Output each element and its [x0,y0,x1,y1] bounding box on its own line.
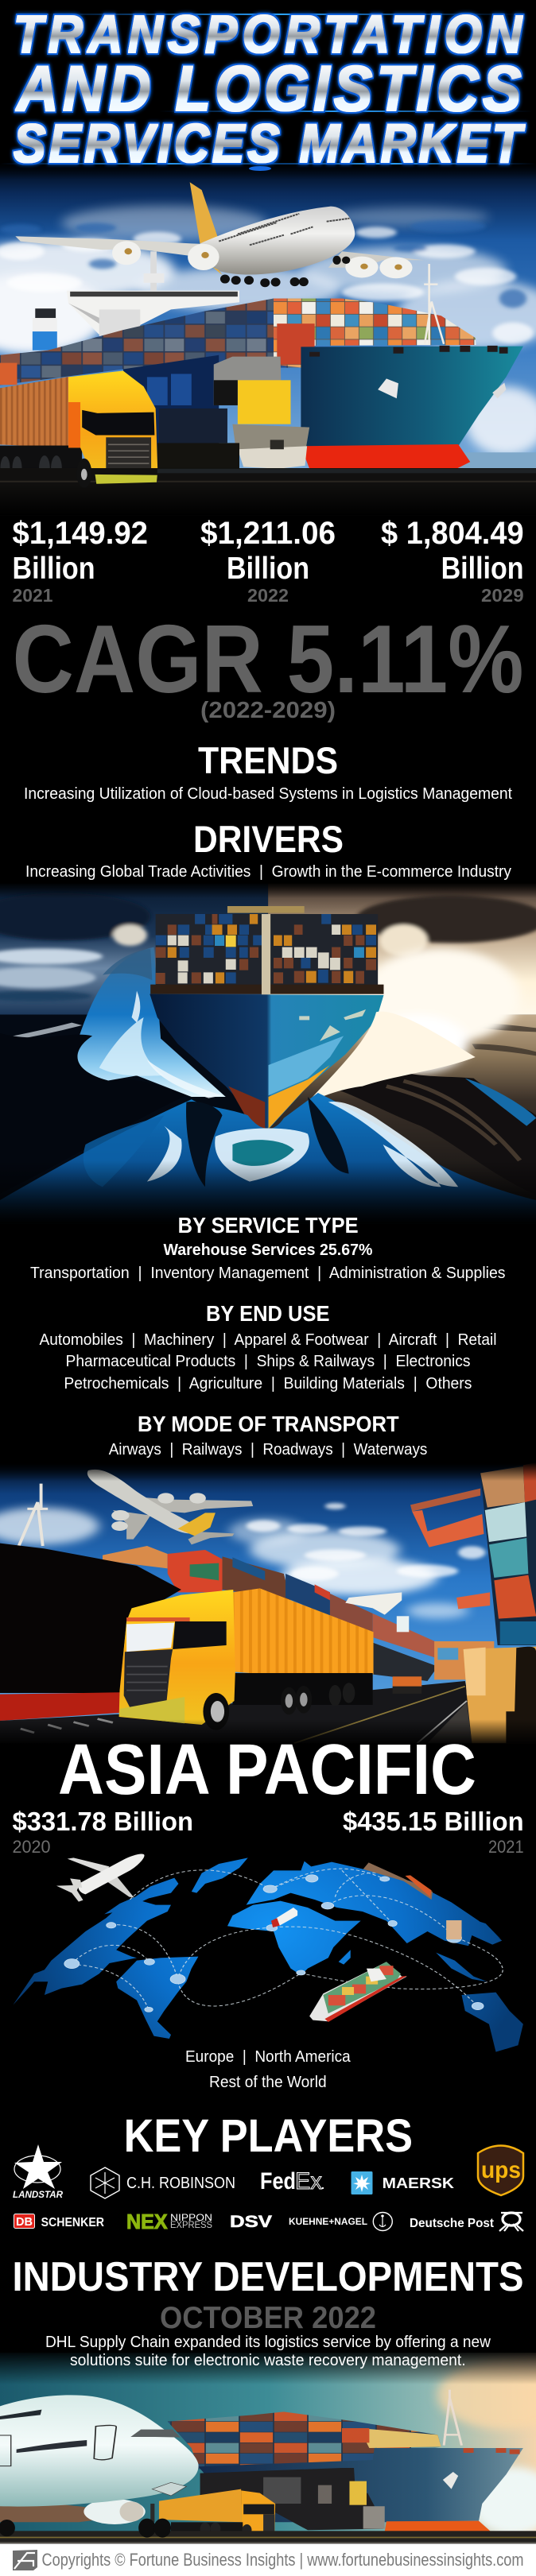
image: truck at port with plane and ship [0,1462,536,1746]
icon: airplane [56,1854,145,1902]
logo: FedEx: Fed [260,2168,296,2194]
value 2022: $1,211.06 [200,516,336,551]
dark wave crests [0,1033,536,1195]
logo: UPS [478,2146,523,2195]
logo: C.H. Robinson: C.H. ROBINSON [126,2175,235,2192]
dashed routes [72,1869,503,2009]
value 2022: Billion [227,552,309,586]
industry developments [13,2254,523,2369]
drivers: DRIVERS [193,818,344,860]
continents [13,1857,523,2052]
icon: parcels [446,1920,461,1939]
logo: Nippon Express: EXPRESS [170,2221,212,2230]
trends [24,739,512,803]
title: AND LOGISTICS [15,52,522,125]
image: airplane, truck, train and ship at port [0,2350,536,2544]
CAGR: (2022-2029) [200,698,336,723]
logo: FedEx: Ex [295,2168,322,2194]
ship hull foreground [0,1544,181,1721]
segment: by mode of transport: BY MODE OF TRANSPORT [138,1412,399,1436]
ship bow [150,994,383,1131]
ship hull [301,346,523,471]
train [200,2468,385,2530]
container stacks [0,296,479,386]
mast [19,1484,48,1546]
right container stack and crane [410,1462,536,1645]
region: Asia Pacific heading: ASIA PACIFIC [58,1730,476,1810]
logo: DSV: DSV [230,2213,272,2231]
logo: UPS: ups [481,2157,521,2183]
foreground waves [0,1093,536,1224]
containers [150,906,383,995]
white foam right [308,1012,476,1102]
trends: Increasing Utilization of Cloud-based Systems in Logistics Management [24,784,512,803]
icon: cargo ship [309,1962,407,2022]
containers [168,2411,441,2469]
drivers: Increasing Global Trade Activities | Growth in the E-commerce Industry [25,862,512,881]
segment: by end use [40,1301,496,1393]
logo: DB Schenker: DB [16,2215,33,2229]
logo: Maersk [352,2171,454,2194]
segment: by service type: BY SERVICE TYPE [178,1213,359,1238]
value 2021: 2021 [488,1837,524,1857]
logo: Fortune Business Insights [13,2550,37,2570]
logo: Nippon Express: NEX [126,2210,168,2233]
train [123,355,309,469]
other regions: Europe | North America [185,2047,351,2066]
value 2029: Billion [441,552,524,586]
key players heading: KEY PLAYERS [124,2110,413,2162]
value 2021: 2021 [13,585,53,606]
logo: C.H. Robinson [91,2167,235,2198]
company logos [13,2144,523,2233]
segment: by end use: Pharmaceutical Products | Ships & Railways | Electronics [65,1352,471,1370]
value 2029 [381,516,524,606]
title glow lines [0,14,536,171]
logo: Nippon Express [126,2210,212,2233]
value 2029: 2029 [481,585,524,606]
segment: by mode of transport [109,1412,427,1458]
value 2021 [343,1807,524,1857]
other regions: Rest of the World [209,2073,327,2091]
value 2021 [13,516,148,606]
market size values [13,516,524,606]
value 2022: 2022 [247,585,289,606]
foremast [424,264,444,344]
value 2020 [13,1807,193,1857]
logo: FedEx: . [321,2179,324,2191]
drivers [25,818,512,881]
value 2021: $435.15 Billion [343,1807,524,1836]
truck [0,370,158,487]
footer [0,2543,536,2576]
segment: by service type: Transportation | Inventory Management | Administration & Supplies [30,1264,506,1282]
segment: by mode of transport: Airways | Railways | Roadways | Waterways [109,1440,427,1458]
logo: Kuehne + Nagel: KUEHNE+NAGEL [289,2216,367,2227]
title: TRANSPORTATION [14,4,523,64]
logo: Landstar: LANDSTAR [13,2189,63,2200]
trends: TRENDS [198,739,338,781]
icon: truck [271,1908,297,1927]
bow spray left [70,947,226,1098]
value 2029: $ 1,804.49 [381,516,524,551]
value 2020: $331.78 Billion [13,1807,193,1836]
truck [119,1588,374,1730]
airplane [0,2395,199,2538]
value 2021: Billion [13,552,95,586]
other regions [185,2047,351,2091]
world map with transport routes [13,1854,523,2052]
logo: Landstar [13,2144,63,2200]
ship hull [198,2448,523,2531]
logo: Kuehne + Nagel [289,2213,392,2230]
icon: train [363,1862,433,1900]
airplane [87,1470,253,1544]
airplane [15,182,424,287]
segment: by service type: Warehouse Services 25.67% [164,1241,372,1259]
segment: by end use: BY END USE [206,1301,329,1326]
logo: Deutsche Post: Deutsche Post [410,2217,494,2230]
image: container ship in stormy sea [0,882,536,1224]
top fade [0,162,536,179]
title: SERVICES MARKET [14,112,526,174]
ship superstructure [33,251,239,351]
truck [159,2489,275,2536]
value 2022 [200,516,336,606]
road [0,1681,479,1743]
logo: Deutsche Post [410,2213,523,2231]
quay [0,468,536,515]
small vehicle [393,1676,421,1694]
title [0,4,536,174]
logo: Nippon Express: NIPPON [170,2214,212,2223]
segment: by service type [30,1213,506,1282]
truck wheel over quay [76,461,157,488]
logo: FedEx [260,2168,324,2194]
logo: DB Schenker: SCHENKER [41,2216,104,2229]
cardboard boxes and forklift [464,1647,536,1743]
industry developments: solutions suite for electronic waste recovery management. [70,2351,466,2369]
distant containers and ship [103,1546,494,1681]
ship mast [444,2390,461,2446]
logo: DB Schenker [14,2214,104,2229]
segment: by end use: Petrochemicals | Agriculture | Building Materials | Others [64,1374,472,1393]
city markers [64,1875,484,2012]
region values [13,1807,524,1857]
logo: Maersk: MAERSK [383,2175,454,2191]
value 2021: $1,149.92 [13,516,148,551]
ground [0,2531,536,2544]
segment: by end use: Automobiles | Machinery | Apparel & Footwear | Aircraft | Retail [40,1331,496,1349]
industry developments: OCTOBER 2022 [160,2301,376,2335]
industry developments: DHL Supply Chain expanded its logistics service by offering a new [45,2333,491,2351]
value 2020: 2020 [13,1837,51,1857]
image: hero with airplane, cargo ship, train and truck [0,162,536,515]
